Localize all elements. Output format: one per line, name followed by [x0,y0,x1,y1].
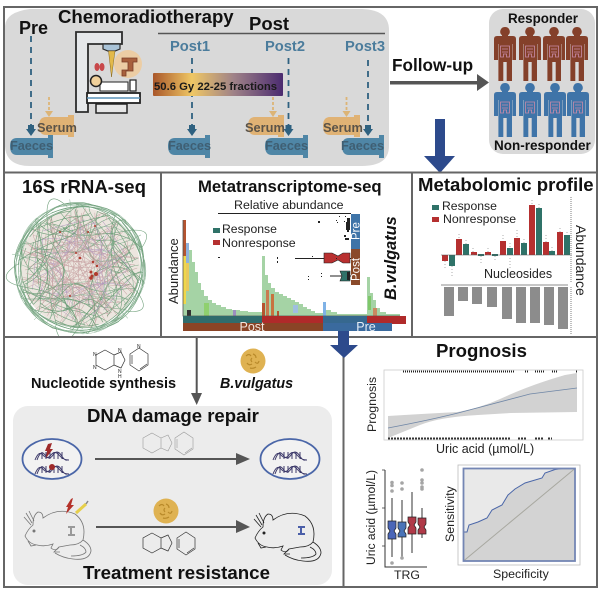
abundance axes [183,220,400,316]
icon: purine and pyrimidine: N [93,365,97,371]
label: Responder: Responder [508,11,579,26]
non-responder figures [494,83,589,137]
heading: Post: Post [249,13,289,34]
ROC curve [458,465,580,565]
panel: 16S rRNA-seq [0,176,169,360]
right axis [570,197,572,334]
serum dashed arrows [49,97,346,112]
panel: Metabolomic profile [418,174,594,334]
stacked bars [183,220,400,316]
side band: Pre [350,214,362,249]
serum arrowheads [45,111,350,117]
grey reference bars [444,287,568,329]
label: B.vulgatus: B.vulgatus [220,376,293,392]
label: Prognosis axis: Prognosis [365,377,379,432]
timeline background [5,9,389,166]
legend: Response [442,199,497,213]
heading: 16S rRNA-seq: 16S rRNA-seq [22,176,146,197]
heading: Metabolomic profile: Metabolomic profile [418,174,594,195]
panel: patient groups [489,9,595,154]
groups background [489,9,595,154]
serum labels: Serum [323,120,363,135]
legend [432,199,516,226]
responder figures [494,27,588,81]
heading: Follow-up: Follow-up [392,55,473,75]
icon: resistant mouse [254,513,321,561]
panel: prognosis [364,340,583,582]
icon: purine and pyrimidine [93,344,148,380]
icon: repaired DNA [260,439,320,479]
icon: purine and pyrimidine: N [118,348,122,354]
legend: Nonresponse [443,212,516,226]
nucleoside bars [441,200,572,276]
time point labels: Post2 [265,39,305,55]
label: Relative abundance: Relative abundance [234,198,344,212]
arrow: resistance [96,520,250,533]
label: B.vulgatus: B.vulgatus [382,216,400,300]
serum labels: Serum [245,120,285,135]
serum labels: Serum [37,120,77,135]
side band: Post [350,249,362,285]
label: Abundance: Abundance [166,238,181,304]
row two frame [4,172,597,337]
legend: Response [222,222,277,236]
icon: treated mouse [24,498,91,559]
dose bar [153,73,283,96]
time point labels [170,39,385,55]
annotation bands [183,316,406,334]
faeces labels: Faeces [265,139,308,153]
faeces labels: Faeces [168,139,211,153]
label: Specificity: Specificity [493,567,550,581]
icon: B.vulgatus bacterium lower [154,498,178,524]
faeces sampling dashed arrows [31,36,368,128]
heading: Chemoradiotherapy: Chemoradiotherapy [58,6,234,27]
faeces tubes [10,135,384,158]
side band: Pre: Pre [350,222,362,240]
arrow: repair [95,453,250,465]
icon: purine and pyrimidine: H [118,374,122,380]
faeces labels: Faeces [341,139,384,153]
heading: Metatranscriptome-seq: Metatranscriptome-seq [198,177,382,196]
label: Non-responder: Non-responder [494,138,592,153]
dose label: 50.6 Gy 22-25 fractions [154,81,277,93]
icon: purine and pyrimidine: N [137,344,141,350]
legend: Nonresponse [222,236,296,250]
annotation bands: Post [239,320,265,334]
mechanism background [13,406,332,585]
arrow: follow-up [390,74,489,91]
relative abundance axis [218,212,351,214]
label: Uric acid axis: Uric acid (µmol/L) [364,470,378,565]
label: Abundance: Abundance [573,225,589,296]
panel: Metatranscriptome-seq [166,177,406,334]
panel: treatment timeline [5,6,389,166]
spline chart [384,370,583,440]
faeces labels: Faeces [10,139,53,153]
faeces arrowheads [26,125,373,136]
top section frame [4,7,597,172]
side band: Post: Post [350,257,362,281]
icon: nucleotides lower [143,532,195,555]
divider line [441,284,568,286]
arrow: into repair [191,338,202,405]
icon: damaged DNA [22,439,82,479]
heading: DNA damage repair: DNA damage repair [87,405,259,426]
serum labels [37,120,363,135]
icon: B.vulgatus bacterium [240,348,266,374]
panel: mechanism [13,338,332,585]
network graph [0,179,169,360]
annotation bands: Pre [356,320,376,334]
icon: radiotherapy machine [76,32,142,113]
faeces labels [10,139,384,153]
label: Sensitivity: Sensitivity [443,485,457,542]
icon: faint nucleotides [143,432,193,455]
label: Nucleosides: Nucleosides [484,267,552,281]
icon: purine and pyrimidine: N [118,369,122,375]
serum tubes [39,115,360,137]
post timeline rule [158,32,385,34]
icon: purine and pyrimidine: N [93,352,97,358]
label: Uric acid: Uric acid (µmol/L) [436,442,534,456]
label: Nucleotide synthesis: Nucleotide synthesis [31,376,176,392]
legend [213,222,296,250]
time point labels: Post1 [170,39,210,55]
horizontal boxplots [218,216,351,281]
arrow: blue down to prognosis [330,331,358,358]
time point labels: Post3 [345,39,385,55]
heading: Treatment resistance: Treatment resistance [83,562,270,583]
bottom frame [4,337,597,587]
heading: Prognosis: Prognosis [436,340,527,361]
label: TRG: TRG [394,568,420,582]
heading: Pre: Pre [19,18,48,38]
arrow: blue down to sequencing [424,119,455,173]
boxplot [382,468,427,567]
